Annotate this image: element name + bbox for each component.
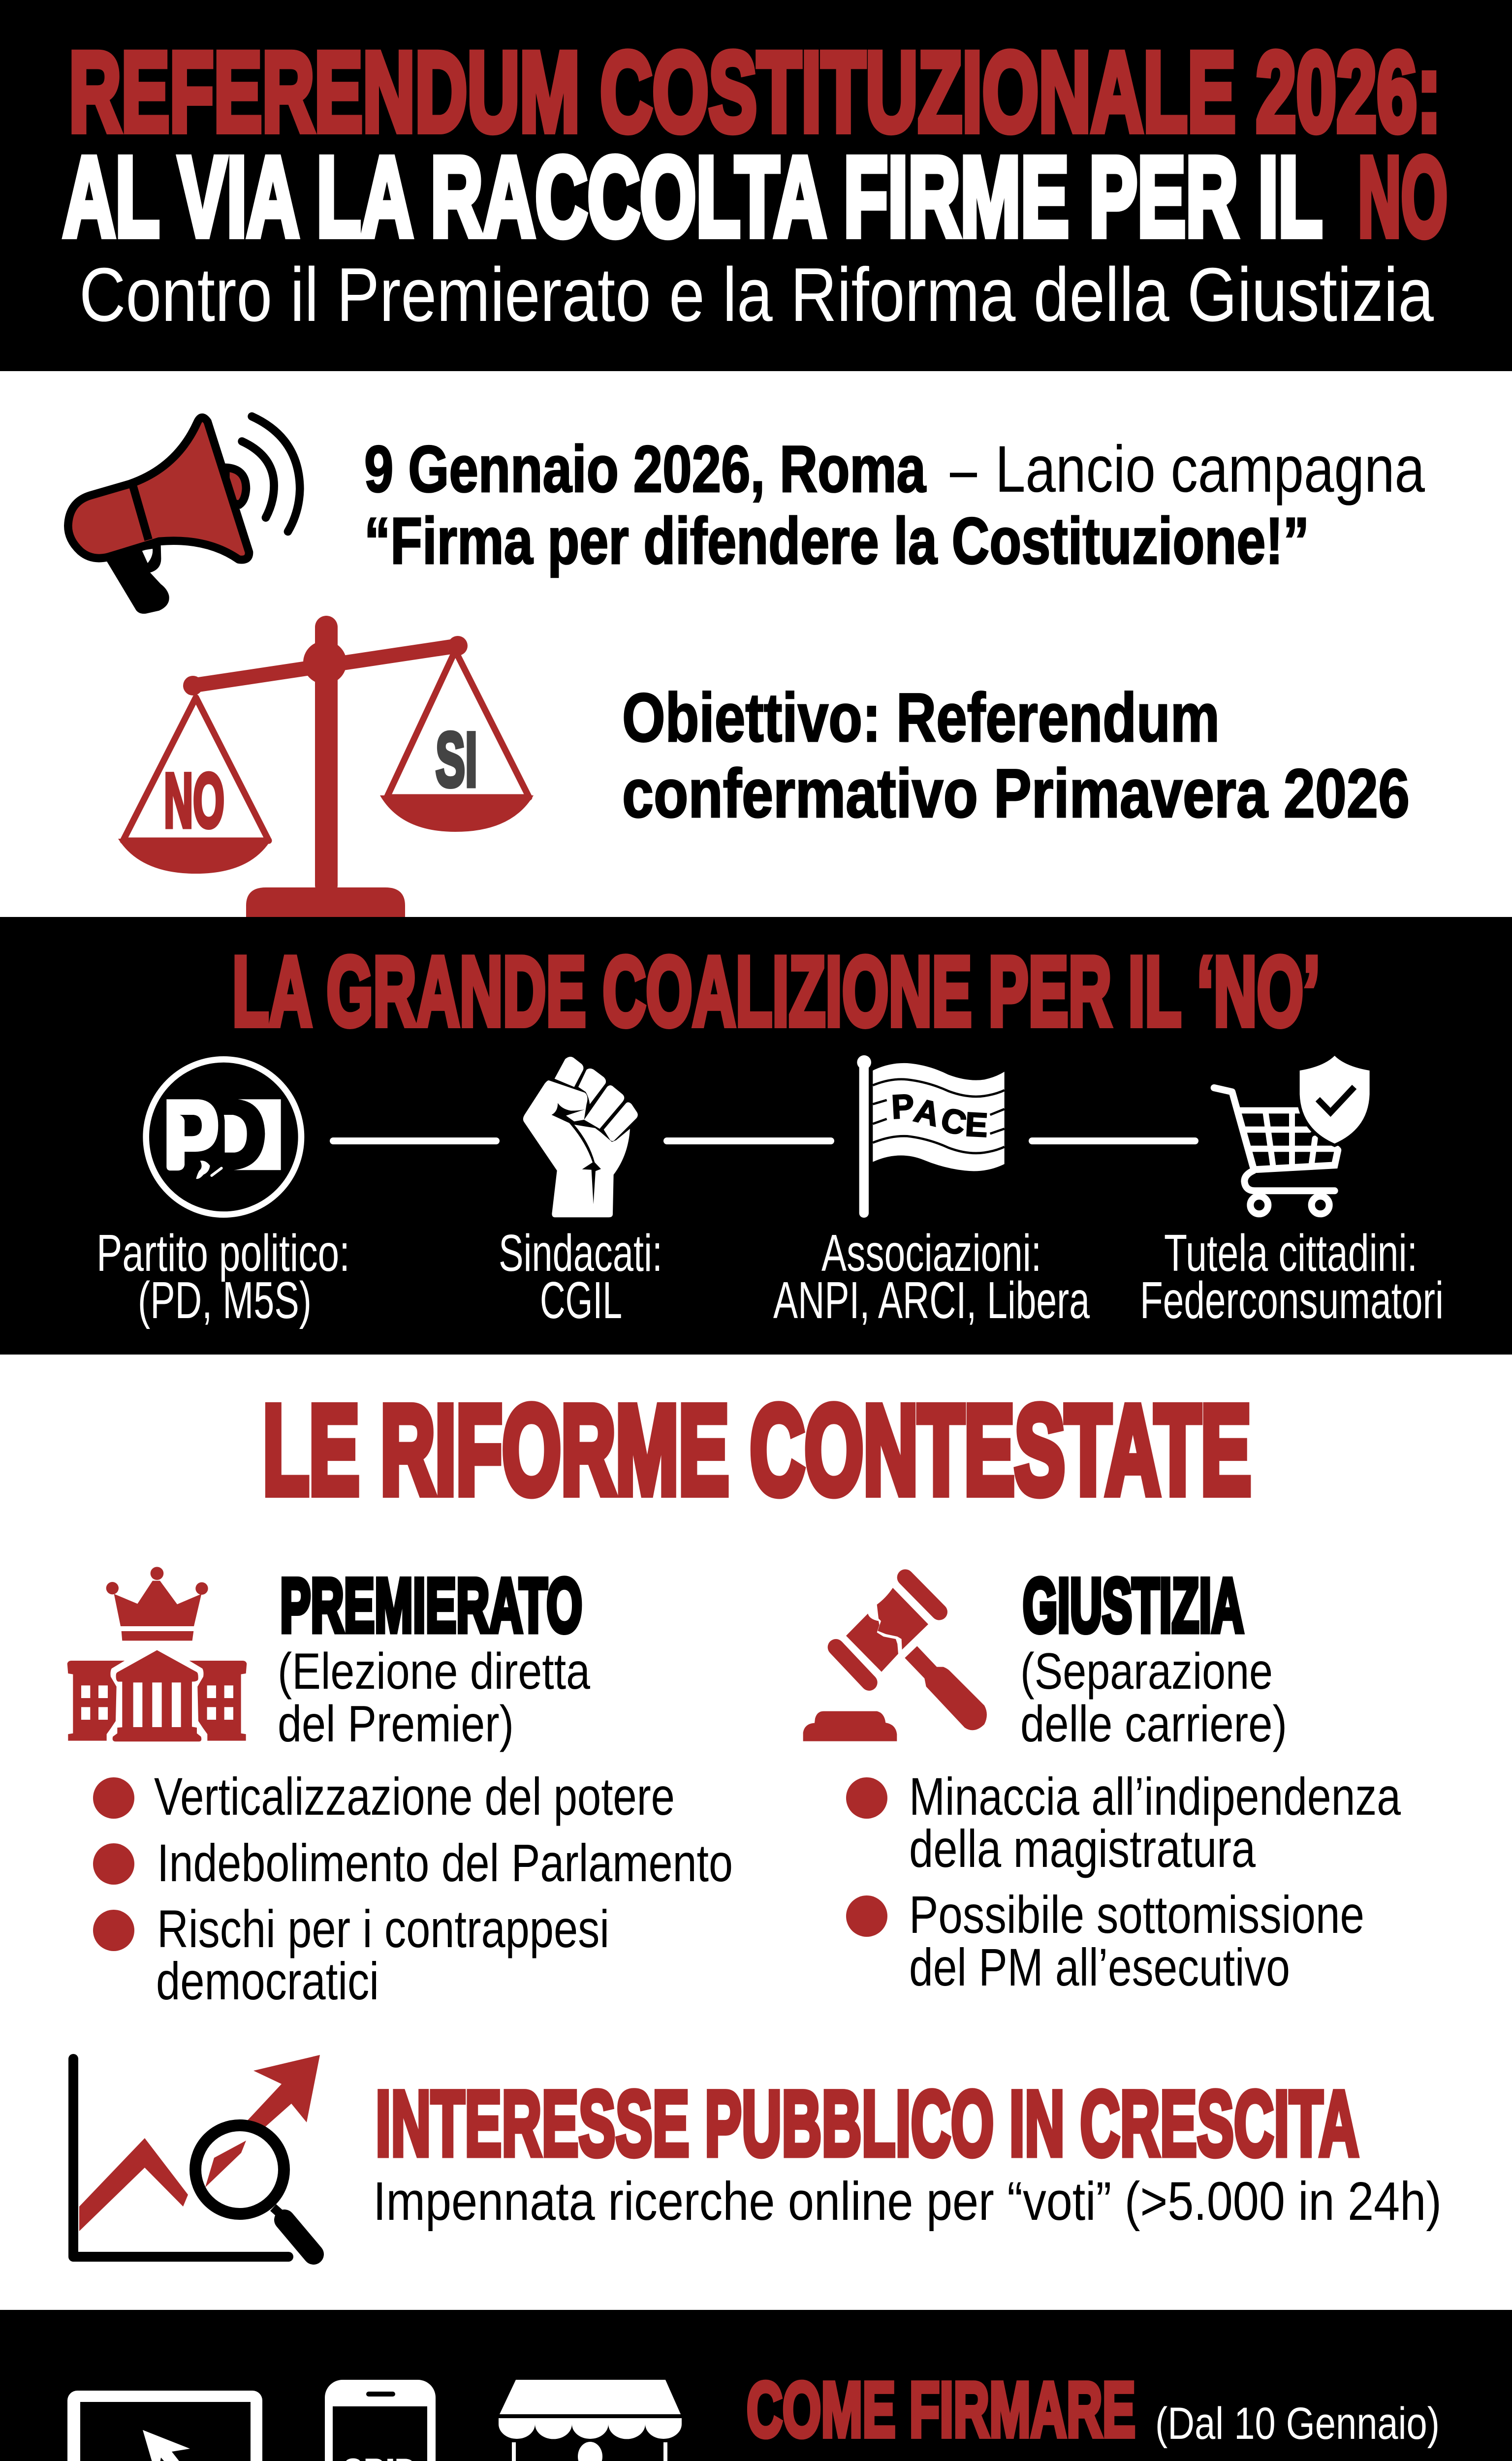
premierato subtitle: (Elezione diretta <box>278 1643 590 1700</box>
how to sign heading: (Dal 10 Gennaio) <box>1155 2398 1440 2449</box>
launch date text <box>364 433 1425 506</box>
bullet: threat to judiciary independence: della magistratura <box>909 1819 1256 1878</box>
label: citizen protection: Tutela cittadini: <box>1164 1224 1418 1282</box>
panel: public interest <box>73 2055 1442 2257</box>
column: premierato <box>67 1563 733 2011</box>
icon: PACE flag: PACE <box>890 1087 989 1144</box>
icon: scales with NO and SI: SI <box>436 717 477 803</box>
how to sign heading: COME FIRMARE <box>747 2366 1135 2453</box>
icon: raised fist <box>523 1057 638 1217</box>
bullet: weakening of parliament: Indebolimento del Parlamento <box>157 1833 733 1893</box>
label: political party: Partito politico: <box>96 1224 350 1282</box>
icon: broken gavel <box>803 1578 987 1741</box>
label: associations: ANPI, ARCI, Libera <box>773 1271 1090 1329</box>
launch date text: – <box>950 433 977 506</box>
label: political party <box>96 1224 350 1329</box>
icon: scales with NO and SI: NO <box>164 758 224 844</box>
bullet: threat to judiciary independence: Minaccia all’indipendenza <box>909 1767 1401 1826</box>
objective text: Obiettivo: Referendum <box>622 679 1220 756</box>
bullet: threat to judiciary independence <box>846 1767 1401 1878</box>
panel: contested reforms <box>67 1380 1401 2011</box>
label: political party: (PD, M5S) <box>138 1271 312 1329</box>
icon: signature stall <box>499 2380 682 2461</box>
panel: launch announcement <box>68 416 1425 614</box>
giustizia title: GIUSTIZIA <box>1023 1563 1244 1648</box>
icon: PD logo <box>146 1059 301 1215</box>
giustizia subtitle: delle carriere) <box>1020 1696 1287 1753</box>
panel: header <box>0 0 1512 371</box>
giustizia subtitle <box>1020 1643 1287 1753</box>
label: citizen protection <box>1140 1224 1444 1329</box>
bullet: prosecutor subordination: del PM all’esecutivo <box>909 1937 1290 1997</box>
launch date text: Lancio campagna <box>995 433 1425 506</box>
label: unions: CGIL <box>540 1271 622 1329</box>
bullet: prosecutor subordination <box>846 1885 1364 1997</box>
bullet: prosecutor subordination: Possibile sottomissione <box>909 1885 1364 1944</box>
icon: shopping cart with shield <box>1214 1056 1370 1214</box>
bullet: checks and balances <box>93 1899 609 2011</box>
premierato title: PREMIERATO <box>280 1563 582 1648</box>
panel: coalition <box>0 917 1512 1355</box>
icon: desktop monitor with cursor <box>67 2391 262 2461</box>
panel: objective <box>118 616 1410 917</box>
panel: how to sign <box>0 2310 1512 2461</box>
label: unions <box>499 1224 662 1329</box>
premierato subtitle: del Premier) <box>278 1696 514 1753</box>
bullet: checks and balances: democratici <box>156 1951 379 2011</box>
icon: crown over government building <box>67 1567 247 1741</box>
icon: scales with NO and SI <box>118 616 534 917</box>
column: giustizia <box>803 1563 1401 1997</box>
label: unions: Sindacati: <box>499 1224 662 1282</box>
connector lines <box>330 1137 1198 1144</box>
launch date text: 9 Gennaio 2026, Roma <box>364 433 926 506</box>
premierato subtitle <box>278 1643 590 1753</box>
objective text <box>622 679 1410 832</box>
label: associations: Associazioni: <box>821 1224 1041 1282</box>
bullet: verticalization: Verticalizzazione del potere <box>154 1767 675 1826</box>
giustizia subtitle: (Separazione <box>1020 1643 1273 1700</box>
label: associations <box>773 1224 1090 1329</box>
icon: PACE flag <box>857 1055 1005 1218</box>
bullet: checks and balances: Rischi per i contrappesi <box>157 1899 609 1958</box>
icon: smartphone with SPID <box>325 2380 436 2461</box>
icon: megaphone <box>68 416 300 614</box>
icon: growth chart with magnifier <box>73 2055 320 2257</box>
